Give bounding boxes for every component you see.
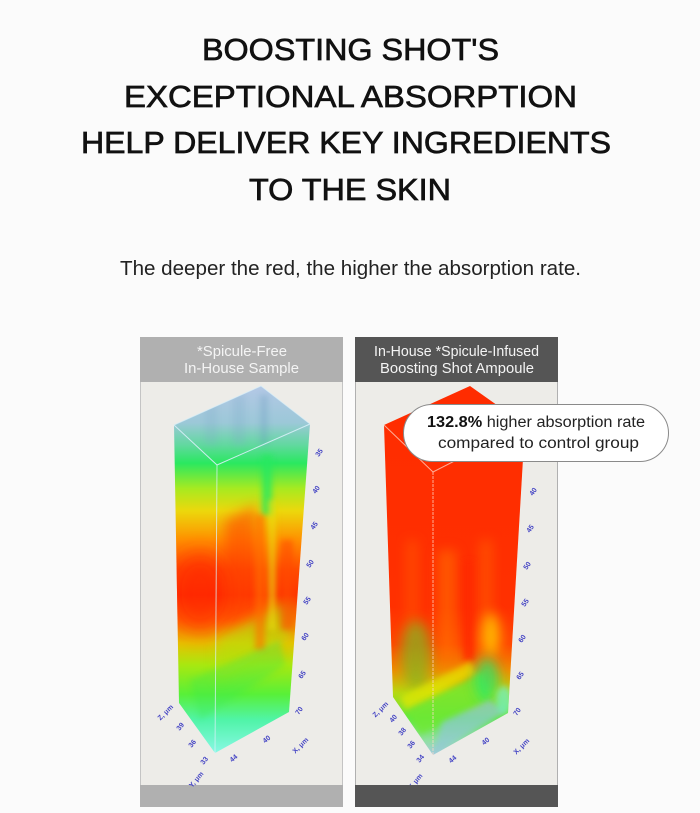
axis labels: 65	[298, 670, 308, 680]
panel header: In-House *Spicule-Infused	[374, 344, 539, 360]
callout: 132.8% higher absorption rate	[427, 414, 645, 431]
axis labels: 65	[516, 671, 526, 681]
title	[81, 32, 611, 207]
axis labels: 70	[295, 706, 305, 716]
axis labels: 33	[200, 756, 210, 766]
panel: spicule-free sample	[140, 337, 343, 807]
column edges	[384, 425, 525, 755]
axis labels: Z, μm	[157, 704, 175, 722]
axis labels: Y, μm	[188, 771, 205, 789]
axis labels: 60	[518, 634, 528, 644]
axis labels: 36	[407, 740, 417, 750]
title: HELP DELIVER KEY INGREDIENTS	[81, 125, 611, 160]
axis labels: 55	[521, 598, 531, 608]
axis labels	[372, 487, 539, 791]
axis labels: 40	[481, 737, 491, 747]
title: BOOSTING SHOT'S	[202, 32, 499, 67]
axis labels: 40	[389, 714, 399, 724]
axis labels: 44	[448, 755, 458, 765]
axis labels: 55	[303, 596, 313, 606]
panel header: In-House Sample	[184, 361, 299, 377]
axis labels: 35	[315, 448, 325, 458]
axis labels: 36	[188, 739, 198, 749]
panel header: Boosting Shot Ampoule	[380, 361, 534, 377]
axis labels: 45	[310, 521, 320, 531]
axis labels: 70	[513, 707, 523, 717]
3D absorption column: control	[170, 380, 315, 760]
panel footer	[355, 785, 558, 807]
panel footer	[140, 785, 343, 807]
axis labels: 40	[529, 487, 539, 497]
panel: spicule-infused ampoule	[355, 337, 558, 807]
axis labels: 39	[176, 722, 186, 732]
axis labels: X, μm	[292, 737, 310, 755]
axis labels: 40	[262, 735, 272, 745]
axis labels: 44	[229, 754, 239, 764]
callout	[404, 404, 668, 462]
3D absorption column: ampoule	[380, 380, 530, 760]
title: EXCEPTIONAL ABSORPTION	[124, 79, 577, 114]
axis labels: 50	[306, 559, 316, 569]
panel header	[140, 337, 343, 382]
axis labels: Z, μm	[372, 701, 390, 719]
axis labels: 45	[526, 524, 536, 534]
axis labels: X, μm	[513, 738, 531, 756]
axis labels: Y, μm	[407, 773, 424, 791]
panel header: *Spicule-Free	[197, 344, 287, 360]
panel background	[356, 338, 558, 806]
title: TO THE SKIN	[249, 172, 451, 207]
axis labels	[157, 448, 325, 789]
axis labels: 40	[312, 485, 322, 495]
axis labels: 34	[416, 754, 426, 764]
column edges	[174, 386, 310, 753]
panel header	[355, 337, 558, 382]
axis labels: 60	[301, 632, 311, 642]
subtitle: The deeper the red, the higher the absorption rate.	[120, 258, 581, 280]
callout: compared to control group	[438, 435, 639, 452]
axis labels: 38	[398, 727, 408, 737]
axis labels: 50	[523, 561, 533, 571]
panel background	[140, 338, 342, 806]
